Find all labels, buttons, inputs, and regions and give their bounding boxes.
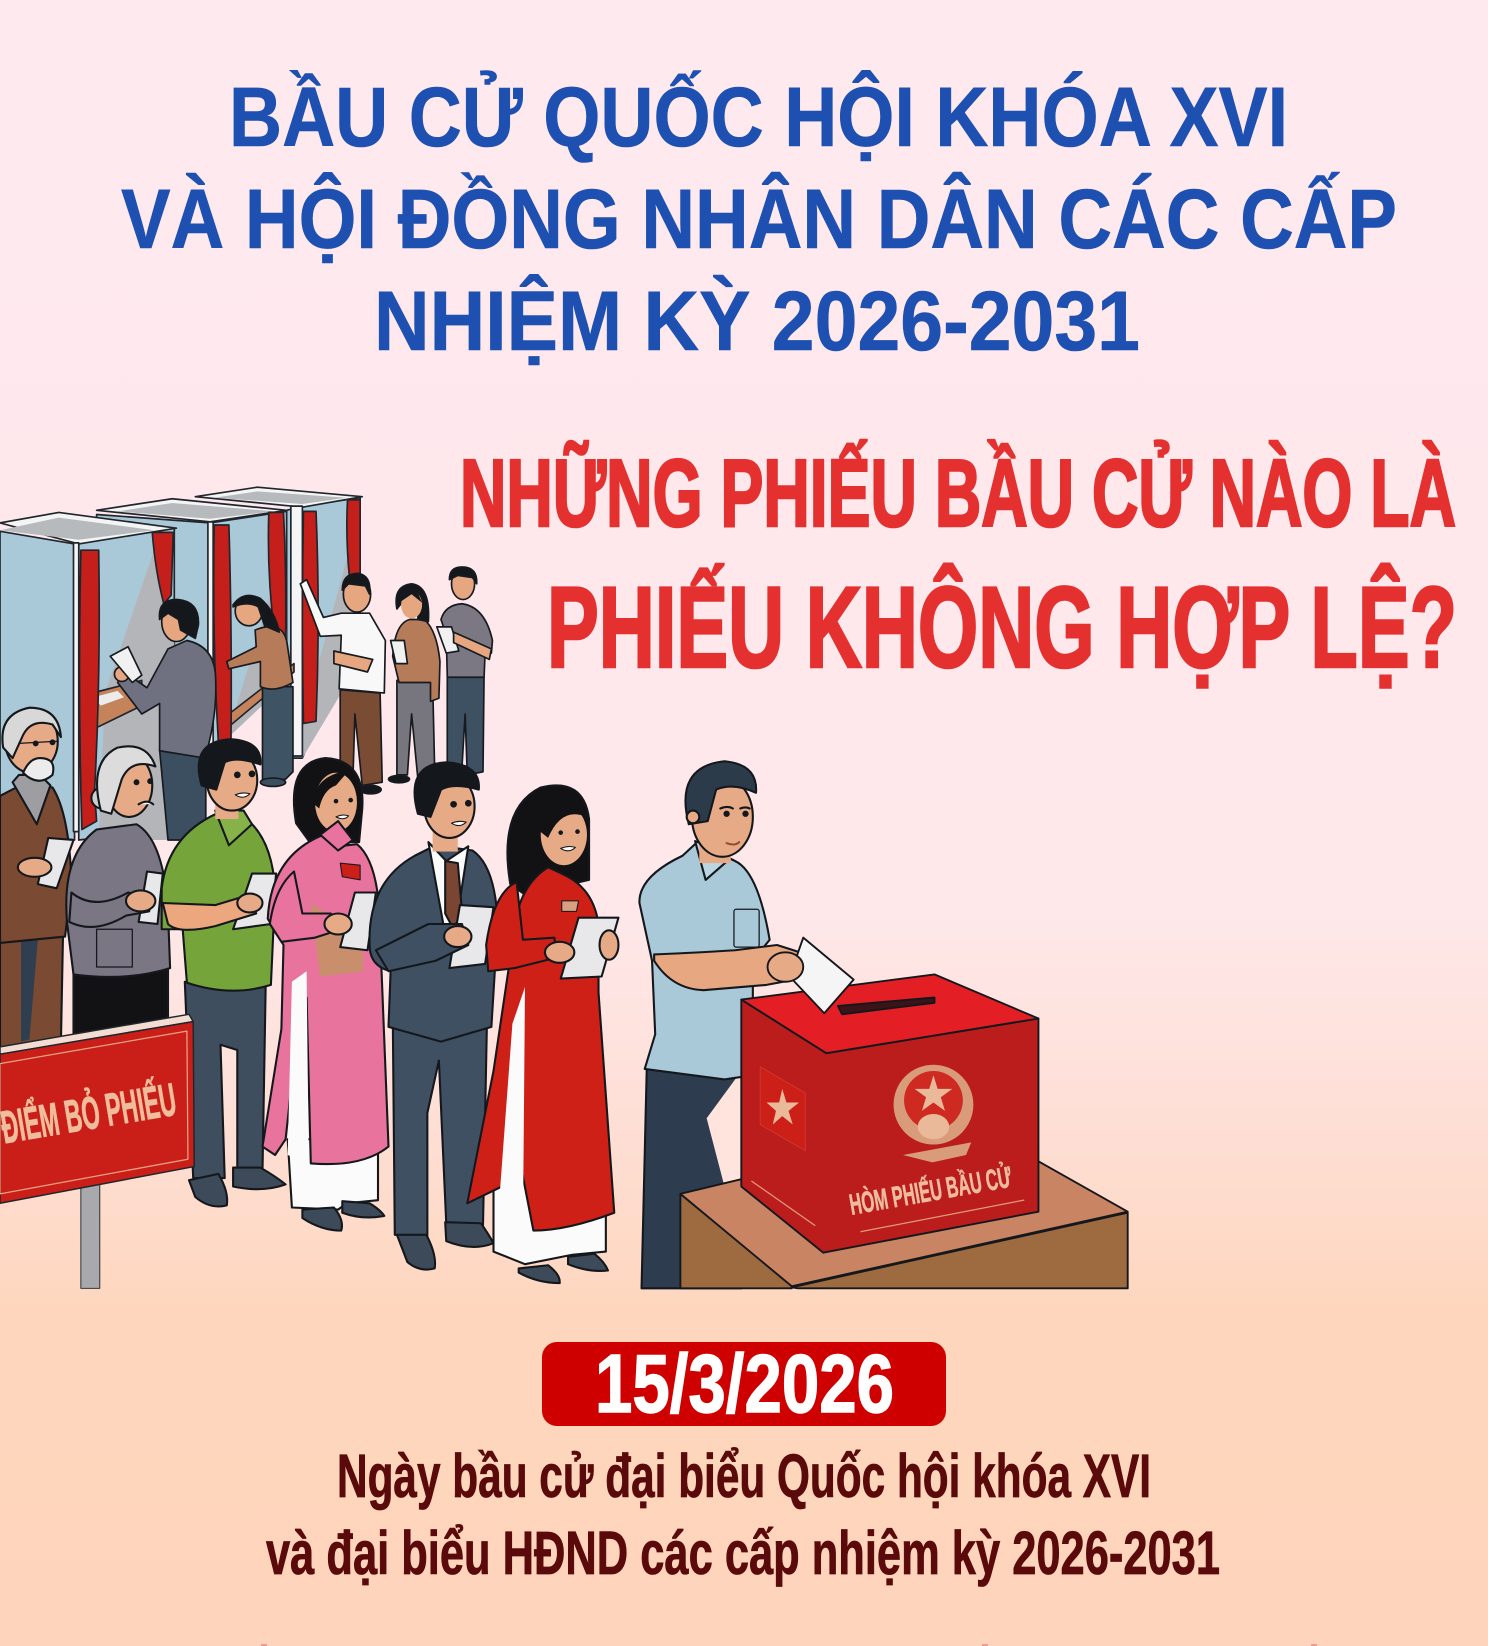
voter hand (768, 952, 803, 982)
elderly woman (66, 746, 170, 1042)
woman in red ao dai (467, 785, 618, 1283)
voter casting ballot (639, 761, 803, 1288)
state emblem (894, 1065, 973, 1162)
election date description (266, 1442, 1220, 1587)
man in white shirt (300, 573, 385, 794)
illustration: voters and polling station (0, 487, 1128, 1288)
woman in pink ao dai (262, 758, 388, 1231)
voting booth 2 (97, 499, 294, 753)
title (121, 70, 1397, 368)
elderly man (0, 708, 74, 1048)
man in green polo shirt (162, 739, 286, 1206)
title: NHIỆM KỲ 2026-2031 (374, 274, 1140, 368)
woman writing ballot in booth 2 (227, 595, 293, 786)
voting booth 1 (0, 512, 176, 840)
ballot box: HÒM PHIẾU BẦU CỬ (847, 1160, 1014, 1222)
man writing ballot in booth 1 (110, 600, 216, 840)
election date description: Ngày bầu cử đại biểu Quốc hội khóa XVI (337, 1442, 1151, 1510)
polling place sign: ĐIỂM BỎ PHIẾU (0, 1073, 180, 1153)
woman in brown blouse (388, 584, 440, 783)
headline question (460, 439, 1457, 692)
table (680, 1161, 1128, 1288)
voting booth 3 (195, 487, 362, 758)
ballot box (741, 938, 1038, 1253)
man in grey T-shirt (437, 567, 492, 775)
date badge: 15/3/2026 (595, 1337, 894, 1430)
man in dark suit (370, 762, 498, 1270)
title: BẦU CỬ QUỐC HỘI KHÓA XVI (229, 70, 1288, 164)
polling place sign (0, 1014, 194, 1288)
